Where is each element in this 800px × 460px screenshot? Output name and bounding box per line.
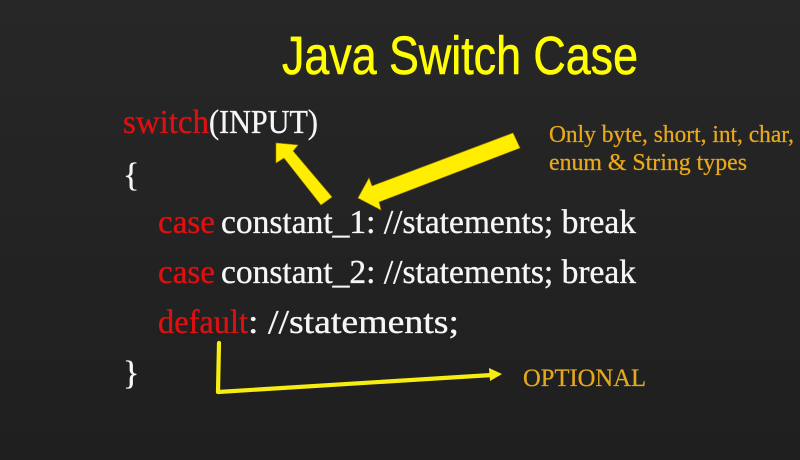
arrow: default is optional: [218, 343, 502, 392]
callout: allowed types: enum & String types: [549, 150, 747, 176]
case 1 line: constant_1: //statements; break: [221, 204, 636, 241]
switch line: switch: [123, 104, 209, 141]
callout: allowed types: [549, 122, 794, 176]
default line: [158, 304, 459, 341]
arrow: types note to input: [358, 133, 520, 210]
case 2 line: case: [158, 254, 215, 291]
title: Java Switch Case: [282, 26, 638, 86]
code block: [123, 104, 636, 392]
opening brace: {: [123, 157, 139, 194]
arrow: up to INPUT: [276, 143, 332, 205]
case 1 line: case: [158, 204, 215, 241]
default line: : //statements;: [248, 304, 459, 341]
default line: default: [158, 304, 249, 341]
case 2 line: constant_2: //statements; break: [221, 254, 636, 291]
label: OPTIONAL: OPTIONAL: [523, 365, 646, 392]
switch line: [123, 104, 318, 141]
closing brace: }: [123, 355, 139, 392]
switch line: (INPUT): [209, 104, 318, 141]
callout: allowed types: Only byte, short, int, char,: [549, 122, 794, 148]
